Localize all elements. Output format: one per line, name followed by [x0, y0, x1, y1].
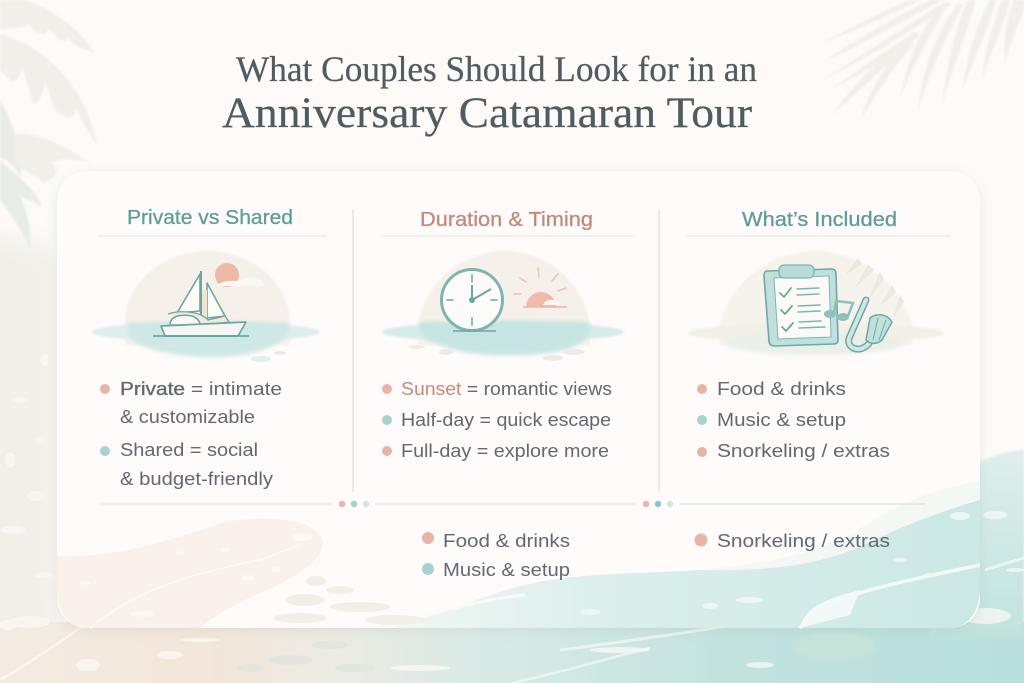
list: private vs shared: & customizable [120, 407, 255, 427]
list: private vs shared: Shared = social [120, 440, 258, 460]
list: duration and timing [382, 379, 612, 461]
list: what's included: Music & setup [717, 410, 846, 430]
panel: duration and timing [380, 209, 636, 461]
bottom list: food and music: Music & setup [443, 560, 570, 580]
title: Anniversary Catamaran Tour [222, 90, 752, 137]
palm frond: top right [822, 0, 1024, 122]
list: private vs shared [100, 379, 282, 489]
list: private vs shared: Private = intimate [120, 379, 282, 399]
heading: private vs shared: Private vs Shared [127, 207, 293, 229]
palm fronds: top left [0, 0, 97, 250]
divider with dots [99, 501, 925, 507]
card sand wash [57, 519, 323, 628]
list: duration and timing: Sunset = romantic views [401, 379, 612, 399]
list: duration and timing: Full-day = explore more [401, 441, 609, 461]
heading: what's included: What’s Included [742, 209, 897, 231]
bottom list: food and music: Food & drinks [443, 531, 570, 551]
list: what's included [697, 379, 890, 461]
bottom list: food and music [422, 531, 570, 580]
bottom list: snorkeling: Snorkeling / extras [717, 531, 890, 551]
heading: duration and timing: Duration & Timing [420, 209, 593, 231]
panel: what's included [687, 209, 951, 461]
list: private vs shared: & budget-friendly [120, 469, 273, 489]
icon: checklist, music note and snorkel [688, 251, 944, 355]
card shadow [57, 174, 980, 630]
main panel card [57, 171, 980, 628]
title: What Couples Should Look for in an [236, 49, 757, 89]
list: duration and timing: Half-day = quick escape [401, 410, 611, 430]
list: what's included: Food & drinks [717, 379, 846, 399]
card sea wash [390, 490, 980, 628]
icon: sailboat at sea [92, 251, 320, 362]
panel: private vs shared [92, 207, 327, 489]
icon: clock and sunset [382, 251, 624, 361]
list: what's included: Snorkeling / extras [717, 441, 890, 461]
title [222, 49, 757, 137]
